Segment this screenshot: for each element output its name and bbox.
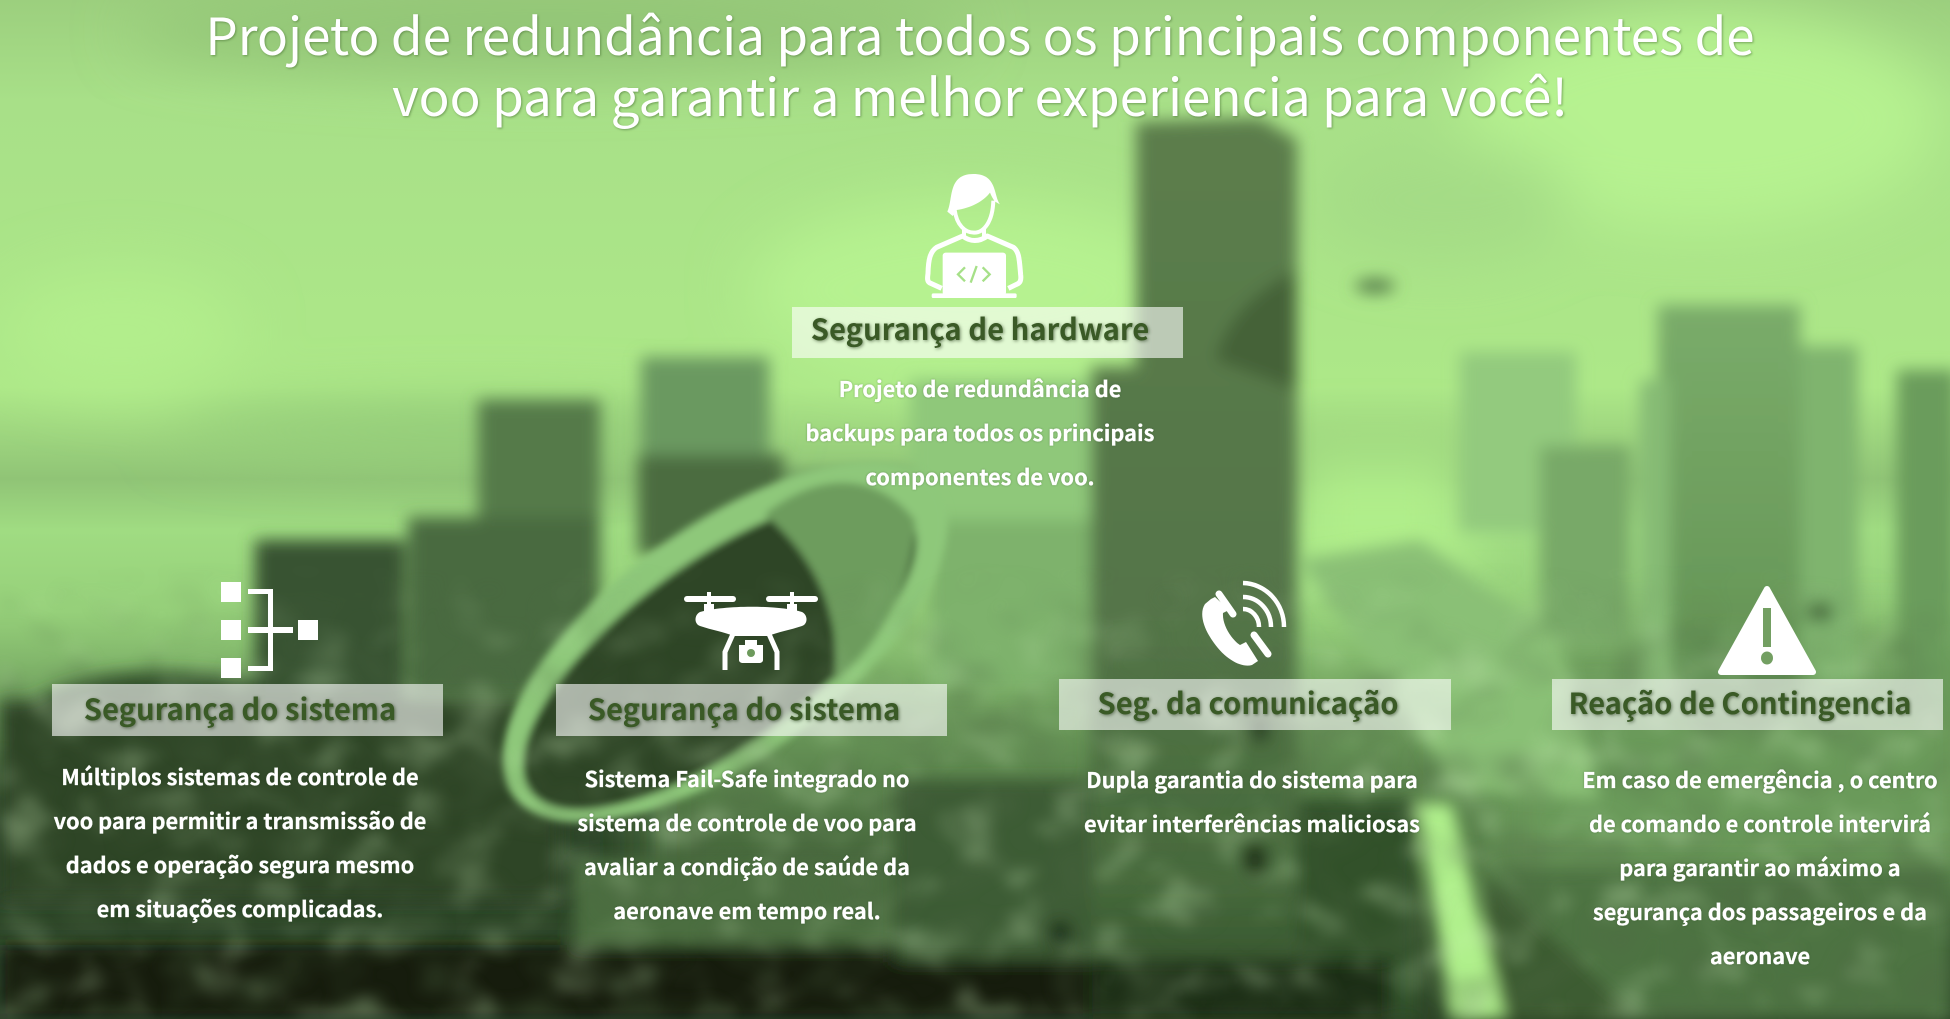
heading: contingencia: Reação de Contingencia (1569, 681, 1911, 723)
text: hardware: backups para todos os principais (806, 417, 1154, 448)
text: sistema 1: voo para permitir a transmissão de (54, 805, 426, 836)
text: sistema 2: Sistema Fail-Safe integrado no (584, 763, 910, 794)
text: comunicação: evitar interferências maliciosas (1084, 808, 1420, 839)
heading: sistema 2: Segurança do sistema (588, 687, 900, 729)
heading: sistema 1: Segurança do sistema (84, 687, 396, 729)
text: contingencia (1582, 764, 1938, 971)
text: comunicação (1084, 764, 1420, 839)
text: sistema 2: sistema de controle de voo para (577, 807, 917, 838)
text: contingencia: de comando e controle intervirá (1589, 808, 1931, 839)
text: sistema 1: dados e operação segura mesmo (66, 849, 414, 880)
text: contingencia: aeronave (1710, 940, 1810, 971)
heading: sistema 1 (52, 684, 443, 736)
text: sistema 2: avaliar a condição de saúde da (584, 851, 910, 882)
heading: comunicação: Seg. da comunicação (1098, 681, 1398, 723)
text: sistema 1 (54, 761, 426, 924)
heading: comunicação (1059, 679, 1451, 730)
text: sistema 2: aeronave em tempo real. (613, 895, 881, 926)
text: contingencia: segurança dos passageiros e da (1593, 896, 1927, 927)
icon: phone (1202, 580, 1286, 666)
text: sistema 2 (577, 763, 917, 926)
heading: sistema 2 (556, 684, 947, 736)
icon: warning (1718, 586, 1816, 675)
icon: network (221, 582, 318, 678)
heading: hardware: Segurança de hardware (811, 307, 1149, 349)
text: sistema 1: Múltiplos sistemas de controle de (61, 761, 419, 792)
text: contingencia: para garantir ao máximo a (1619, 852, 1901, 883)
text: comunicação: Dupla garantia do sistema para (1086, 764, 1418, 795)
text: sistema 1: em situações complicadas. (97, 893, 383, 924)
vehicle (445, 394, 1005, 890)
icon: developer with laptop (925, 174, 1024, 298)
text: hardware: Projeto de redundância de (839, 373, 1121, 404)
text: contingencia: Em caso de emergência , o centro (1582, 764, 1938, 795)
text: hardware: componentes de voo. (865, 461, 1095, 492)
icon: drone (684, 592, 818, 670)
title: voo para garantir a melhor experiencia para você! (392, 57, 1568, 131)
text: hardware (806, 373, 1154, 492)
title (205, 0, 1755, 131)
